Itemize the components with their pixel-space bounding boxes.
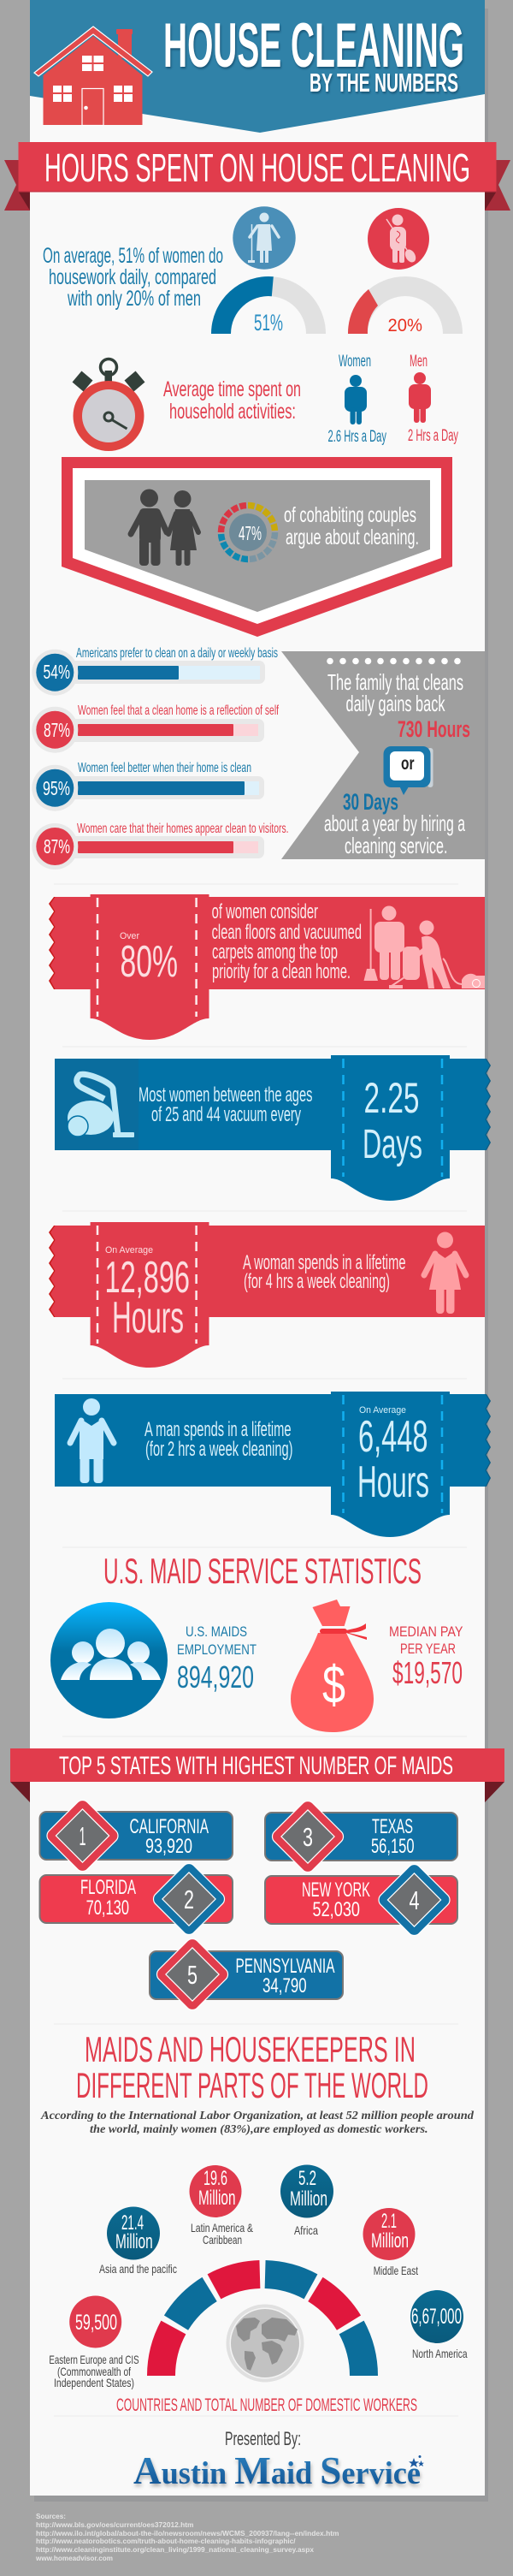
state: Texas: 56,150	[371, 1835, 414, 1858]
stat: Africa: 5.2	[298, 2167, 316, 2190]
women time stat: 2.6 Hrs a Day	[328, 428, 386, 446]
stat: North America: 6,67,000	[411, 2305, 462, 2329]
state: Texas: TEXAS	[372, 1815, 413, 1838]
icon: woman with mop	[233, 206, 296, 270]
header blue banner	[30, 0, 485, 133]
text: 51% of women vs 20% of men	[43, 244, 223, 311]
stat: Latin America: Caribbean	[203, 2233, 242, 2247]
text: 51% of women vs 20% of men: with only 20% of men	[67, 287, 201, 311]
stat: Eastern Europe and CIS: (Commonwealth of	[57, 2365, 131, 2378]
state: New York: NEW YORK	[302, 1879, 370, 1902]
icon: stopwatch	[73, 359, 144, 451]
text: sources: www.homeadvisor.com	[35, 2554, 113, 2562]
state: California: 1	[79, 1821, 86, 1851]
icon: man with broom	[368, 208, 429, 270]
ribbon: 80% of women	[49, 894, 485, 1040]
icon: cleaners with vacuum	[364, 905, 485, 988]
stat: Asia and the Pacific: 21.4	[121, 2211, 144, 2235]
ribbon: 80% of women: priority for a clean home.	[212, 960, 351, 983]
ribbon: 80% of women: of women consider	[212, 900, 318, 923]
ribbon: man lifetime hours	[55, 1392, 491, 1537]
stat: Latin America: Latin America &	[191, 2221, 253, 2235]
icon: vacuum cleaner	[68, 1074, 134, 1137]
state: Pennsylvania: PENNSYLVANIA	[236, 1955, 335, 1978]
chart: 54% bar row: Americans prefer to clean on a daily or weekly basis	[76, 646, 278, 661]
stat: Africa: Million	[290, 2187, 327, 2211]
icon: man	[70, 1398, 114, 1483]
text: average time spent: household activities:	[169, 400, 296, 424]
chart: 87% bar row self: 87%	[44, 719, 70, 741]
panel: family gains back hours: 30 Days	[343, 789, 398, 815]
chart: world arc segments	[161, 2275, 364, 2376]
text: sources	[35, 2512, 339, 2562]
ribbon: man lifetime hours: On Average	[359, 1405, 406, 1416]
ribbon: man lifetime hours: (for 2 hrs a week cleaning)	[145, 1438, 292, 1461]
text: presented by: Presented By:	[225, 2428, 301, 2449]
ribbon: woman lifetime hours: On Average	[105, 1245, 153, 1255]
stat: Eastern Europe and CIS: Eastern Europe and CIS	[49, 2353, 139, 2366]
text: 51% of women vs 20% of men: On average, 51% of women do	[43, 244, 223, 268]
state: California: CALIFORNIA	[130, 1815, 209, 1838]
text: ILO statement: the world, mainly women (83%),are employed as domestic workers.	[90, 2123, 428, 2136]
ribbon: vacuum every 2.25 days	[55, 1055, 491, 1201]
ribbon: man lifetime hours: 6,448	[358, 1412, 428, 1462]
banner: top 5 states	[10, 1748, 504, 1802]
women time stat: Women	[339, 353, 371, 371]
stat: Middle East: Million	[371, 2229, 409, 2253]
stat: median pay: PER YEAR	[400, 1641, 456, 1657]
chart: men 20% gauge	[348, 276, 463, 335]
chart: 87% bar row visitors	[32, 822, 289, 870]
chart: 47% ring: 47%	[239, 522, 262, 544]
stat: Latin America: 19.6	[203, 2167, 227, 2190]
state: New York: 4	[409, 1885, 419, 1915]
stat: North America: North America	[412, 2347, 468, 2360]
ribbon: man lifetime hours: Hours	[357, 1457, 429, 1507]
heading: maids and housekeepers	[76, 2029, 428, 2105]
stat: maids employment: EMPLOYMENT	[177, 1641, 256, 1658]
text: sources: http://www.neatorobotics.com/truth-about-home-cleaning-habits-infographic/	[36, 2537, 296, 2545]
stat: Asia and the Pacific: Asia and the pacific	[99, 2262, 177, 2276]
icon: speech bubble or	[383, 746, 433, 795]
stat: Latin America	[190, 2165, 253, 2247]
ribbon: woman lifetime hours: (for 4 hrs a week cleaning)	[244, 1270, 390, 1293]
state: Florida: 70,130	[86, 1896, 129, 1920]
chart: women 51% gauge: 51%	[254, 310, 283, 335]
state: California: 93,920	[145, 1835, 192, 1858]
stat: Eastern Europe and CIS: 59,500	[75, 2311, 117, 2335]
stat: median pay: MEDIAN PAY	[389, 1623, 463, 1640]
state: Pennsylvania: 5	[187, 1960, 198, 1990]
chart: 47% ring	[221, 505, 275, 560]
icon: money bag	[291, 1600, 374, 1732]
stat: median pay: $19,570	[392, 1655, 463, 1690]
state: New York: 52,030	[313, 1898, 360, 1921]
logo: Austin Maid Service: Austin Maid Service	[133, 2448, 421, 2492]
women time stat	[328, 353, 386, 446]
banner: hours spent on house cleaning	[4, 142, 510, 211]
ribbon: vacuum every 2.25 days: Most women between the ages	[139, 1083, 313, 1107]
state: Florida: 2	[184, 1885, 194, 1914]
text: 51% of women vs 20% of men: housework daily, compared	[49, 265, 216, 289]
chart: 87% bar row self: Women feel that a clean home is a reflection of self	[78, 703, 279, 718]
stat: maids employment: 894,920	[177, 1659, 254, 1695]
stat: Middle East: 2.1	[381, 2210, 397, 2233]
men time stat: 2 Hrs a Day	[408, 427, 458, 445]
men time stat	[408, 353, 458, 445]
ribbon: 80% of women: carpets among the top	[212, 941, 338, 964]
state: Texas	[265, 1798, 457, 1875]
text: sources: http://www.ilo.int/global/about-the-ilo/newsroom/news/WCMS_200937/lang--en/index.htm	[36, 2529, 339, 2537]
chart: 95% bar row	[32, 761, 264, 811]
state: Texas: 3	[303, 1822, 313, 1852]
icon: house	[34, 27, 152, 125]
ribbon: woman lifetime hours: A woman spends in a lifetime	[243, 1251, 405, 1274]
stat: Africa: Africa	[294, 2223, 318, 2237]
ribbon: vacuum every 2.25 days: 2.25	[364, 1074, 419, 1122]
panel: family gains back hours	[281, 651, 485, 859]
ribbon: man lifetime hours: A man spends in a lifetime	[144, 1418, 292, 1441]
icon: woman	[424, 1232, 466, 1314]
text: sources: http://www.cleaninginstitute.org/clean_living/1999_national_cleaning_survey.aspx	[36, 2545, 314, 2554]
ribbon: 80% of women: 80%	[120, 937, 178, 987]
text: average time spent: Average time spent on	[163, 377, 301, 401]
ribbon: 80% of women: clean floors and vacuumed	[212, 921, 362, 944]
stat: Asia and the Pacific: Million	[115, 2230, 153, 2253]
men time stat: Men	[410, 353, 428, 371]
chart: men 20% gauge: 20%	[388, 316, 422, 335]
icon: couple	[131, 490, 198, 566]
text: cohabiting couples: argue about cleaning.	[286, 525, 419, 549]
panel: couples argue chevron	[62, 457, 452, 637]
icon: people circle	[50, 1602, 168, 1718]
stat: Middle East: Middle East	[374, 2264, 418, 2277]
header	[30, 0, 485, 133]
chart: 87% bar row self	[32, 703, 279, 753]
stat: maids employment: U.S. MAIDS	[186, 1623, 247, 1640]
text: sources: Sources:	[36, 2512, 66, 2520]
chart: 54% bar row	[32, 646, 278, 696]
text: ILO statement: According to the International Labor Organization, at least 52 million people around	[40, 2110, 475, 2122]
text: sources: http://www.bls.gov/oes/current/oes372012.htm	[36, 2520, 194, 2529]
state: Pennsylvania	[150, 1936, 343, 2013]
text: cohabiting couples: of cohabiting couples	[284, 503, 416, 527]
state: Florida: FLORIDA	[80, 1876, 136, 1899]
chart: 95% bar row: Women feel better when their home is clean	[78, 761, 251, 775]
stat: maids employment	[177, 1623, 256, 1695]
chart: 87% bar row visitors: 87%	[44, 835, 70, 858]
stat: Latin America: Million	[198, 2187, 236, 2210]
text: average time spent	[163, 377, 301, 424]
icon: speech bubble or: or	[401, 754, 414, 774]
chart: 87% bar row visitors: Women care that their homes appear clean to visitors.	[77, 822, 289, 836]
chart: women 51% gauge	[211, 276, 326, 335]
text: ILO statement	[40, 2110, 475, 2136]
text: cohabiting couples	[284, 503, 419, 549]
icon: money bag: $	[322, 1656, 345, 1715]
state: New York	[265, 1861, 457, 1938]
ribbon: vacuum every 2.25 days: Days	[363, 1122, 422, 1167]
panel: family gains back hours: 730 Hours	[398, 716, 470, 742]
ribbon: woman lifetime hours: Hours	[112, 1293, 184, 1343]
stat: North America	[410, 2290, 468, 2360]
state: Pennsylvania: 34,790	[262, 1974, 307, 1997]
state: Florida	[39, 1861, 233, 1938]
stat: median pay	[389, 1623, 463, 1690]
stat: Eastern Europe and CIS: Independent States)	[54, 2376, 134, 2389]
panel: family gains back hours: cleaning service.	[345, 833, 448, 858]
stat: Africa	[280, 2165, 333, 2237]
panel: family gains back hours: daily gains back	[345, 691, 445, 716]
ribbon: 80% of women: Over	[120, 931, 139, 941]
state: California	[39, 1797, 233, 1874]
chart: 95% bar row: 95%	[43, 777, 70, 799]
ribbon: vacuum every 2.25 days: of 25 and 44 vacuum every	[151, 1103, 301, 1126]
icon: globe	[227, 2306, 303, 2381]
ribbon: woman lifetime hours: 12,896	[104, 1253, 190, 1303]
stat: Asia and the Pacific	[99, 2206, 177, 2276]
stat: Middle East	[363, 2208, 418, 2277]
ribbon: woman lifetime hours	[49, 1222, 485, 1368]
stat: Eastern Europe and CIS	[49, 2295, 139, 2389]
chart: 54% bar row: 54%	[43, 661, 70, 683]
